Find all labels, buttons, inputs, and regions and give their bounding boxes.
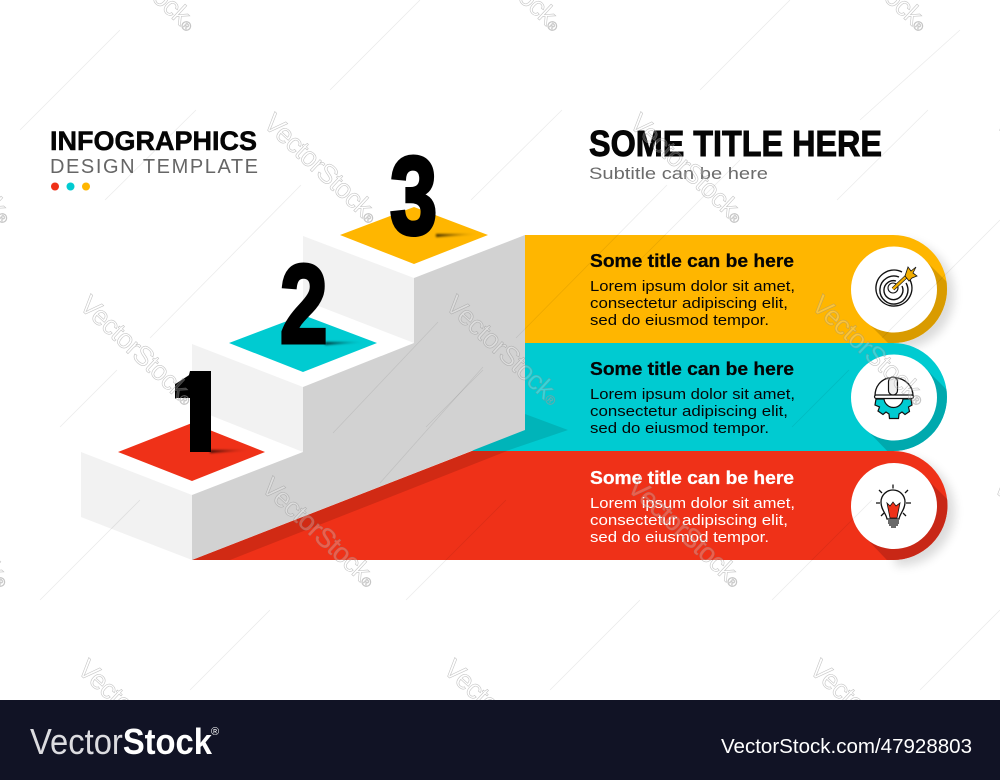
heading: infographics design template: DESIGN TEMPLATE [50, 156, 258, 178]
panel: yellow bar [525, 235, 947, 343]
stairs [81, 207, 525, 560]
number 3: 3 [390, 134, 437, 258]
text: red bar: Some title can be here [590, 468, 794, 488]
footer logo: VectorStock [30, 721, 213, 762]
panel: red bar [192, 451, 948, 560]
icon circle: red bar [851, 463, 937, 549]
number 2: 2 [280, 242, 328, 366]
text: VectorStock® [438, 653, 565, 775]
text: cyan bar [590, 359, 795, 437]
text: VectorStock® [804, 653, 931, 775]
heading: infographics design template [50, 126, 258, 190]
long shadow of the yellow circle [870, 262, 947, 343]
text: red bar [590, 468, 795, 546]
heading: some title here [589, 123, 882, 183]
stair front face: step 2 [192, 344, 303, 452]
long shadow of the cyan circle [870, 370, 947, 451]
icon circle: cyan bar [851, 354, 937, 440]
arrow shadow cast on the cyan bar [472, 414, 568, 451]
heading: some title here: SOME TITLE HERE [589, 123, 882, 164]
footer band [0, 700, 1000, 780]
number 1 [175, 371, 211, 452]
text: yellow bar: Lorem ipsum dolor sit amet, [590, 278, 795, 295]
icon: light bulb [876, 484, 911, 527]
text: VectorStock® [440, 289, 567, 411]
text: yellow bar: Some title can be here [590, 251, 794, 271]
panel: cyan bar [472, 343, 947, 451]
text: VectorStock® [622, 471, 749, 593]
text: VectorStock® [74, 289, 201, 411]
text: VectorStock® [624, 107, 751, 229]
text: VectorStock® [258, 107, 385, 229]
text: red bar: sed do eiusmod tempor. [590, 529, 769, 546]
panel: soft shadow of rounded bars [895, 241, 954, 566]
text: red bar: consectetur adipiscing elit, [590, 512, 788, 529]
tile: step 1 red [118, 423, 265, 481]
tile: step 3 yellow [340, 207, 488, 264]
text: VectorStock® [72, 653, 199, 775]
footer registered mark: ® [211, 726, 219, 738]
icon: target with dart [876, 267, 917, 306]
icon circle: yellow bar [851, 246, 937, 332]
text: red bar: Lorem ipsum dolor sit amet, [590, 495, 795, 512]
stair side wall [192, 235, 525, 560]
heading: some title here: Subtitle can be here [589, 164, 768, 183]
long shadow of the red circle [868, 480, 948, 560]
icon: helmet and gear [874, 377, 914, 418]
text: yellow bar [590, 251, 795, 329]
text: cyan bar: Some title can be here [590, 359, 794, 379]
number shadows [210, 234, 478, 453]
heading: infographics design template: INFOGRAPHICS [50, 126, 257, 156]
text: yellow bar: consectetur adipiscing elit, [590, 295, 788, 312]
text: cyan bar: sed do eiusmod tempor. [590, 420, 769, 437]
stair front face: step 3 [303, 236, 414, 343]
text: cyan bar: consectetur adipiscing elit, [590, 403, 788, 420]
footer image id: VectorStock.com/47928803 [721, 735, 972, 758]
tile: step 2 cyan [229, 315, 377, 372]
number 1: 1 [166, 350, 228, 475]
text: yellow bar: sed do eiusmod tempor. [590, 312, 769, 329]
stair front face: step 1 [81, 452, 192, 560]
stair shadow on the red bar [192, 451, 507, 560]
text: VectorStock® [806, 289, 933, 411]
text: cyan bar: Lorem ipsum dolor sit amet, [590, 386, 795, 403]
text: VectorStock® [256, 471, 383, 593]
